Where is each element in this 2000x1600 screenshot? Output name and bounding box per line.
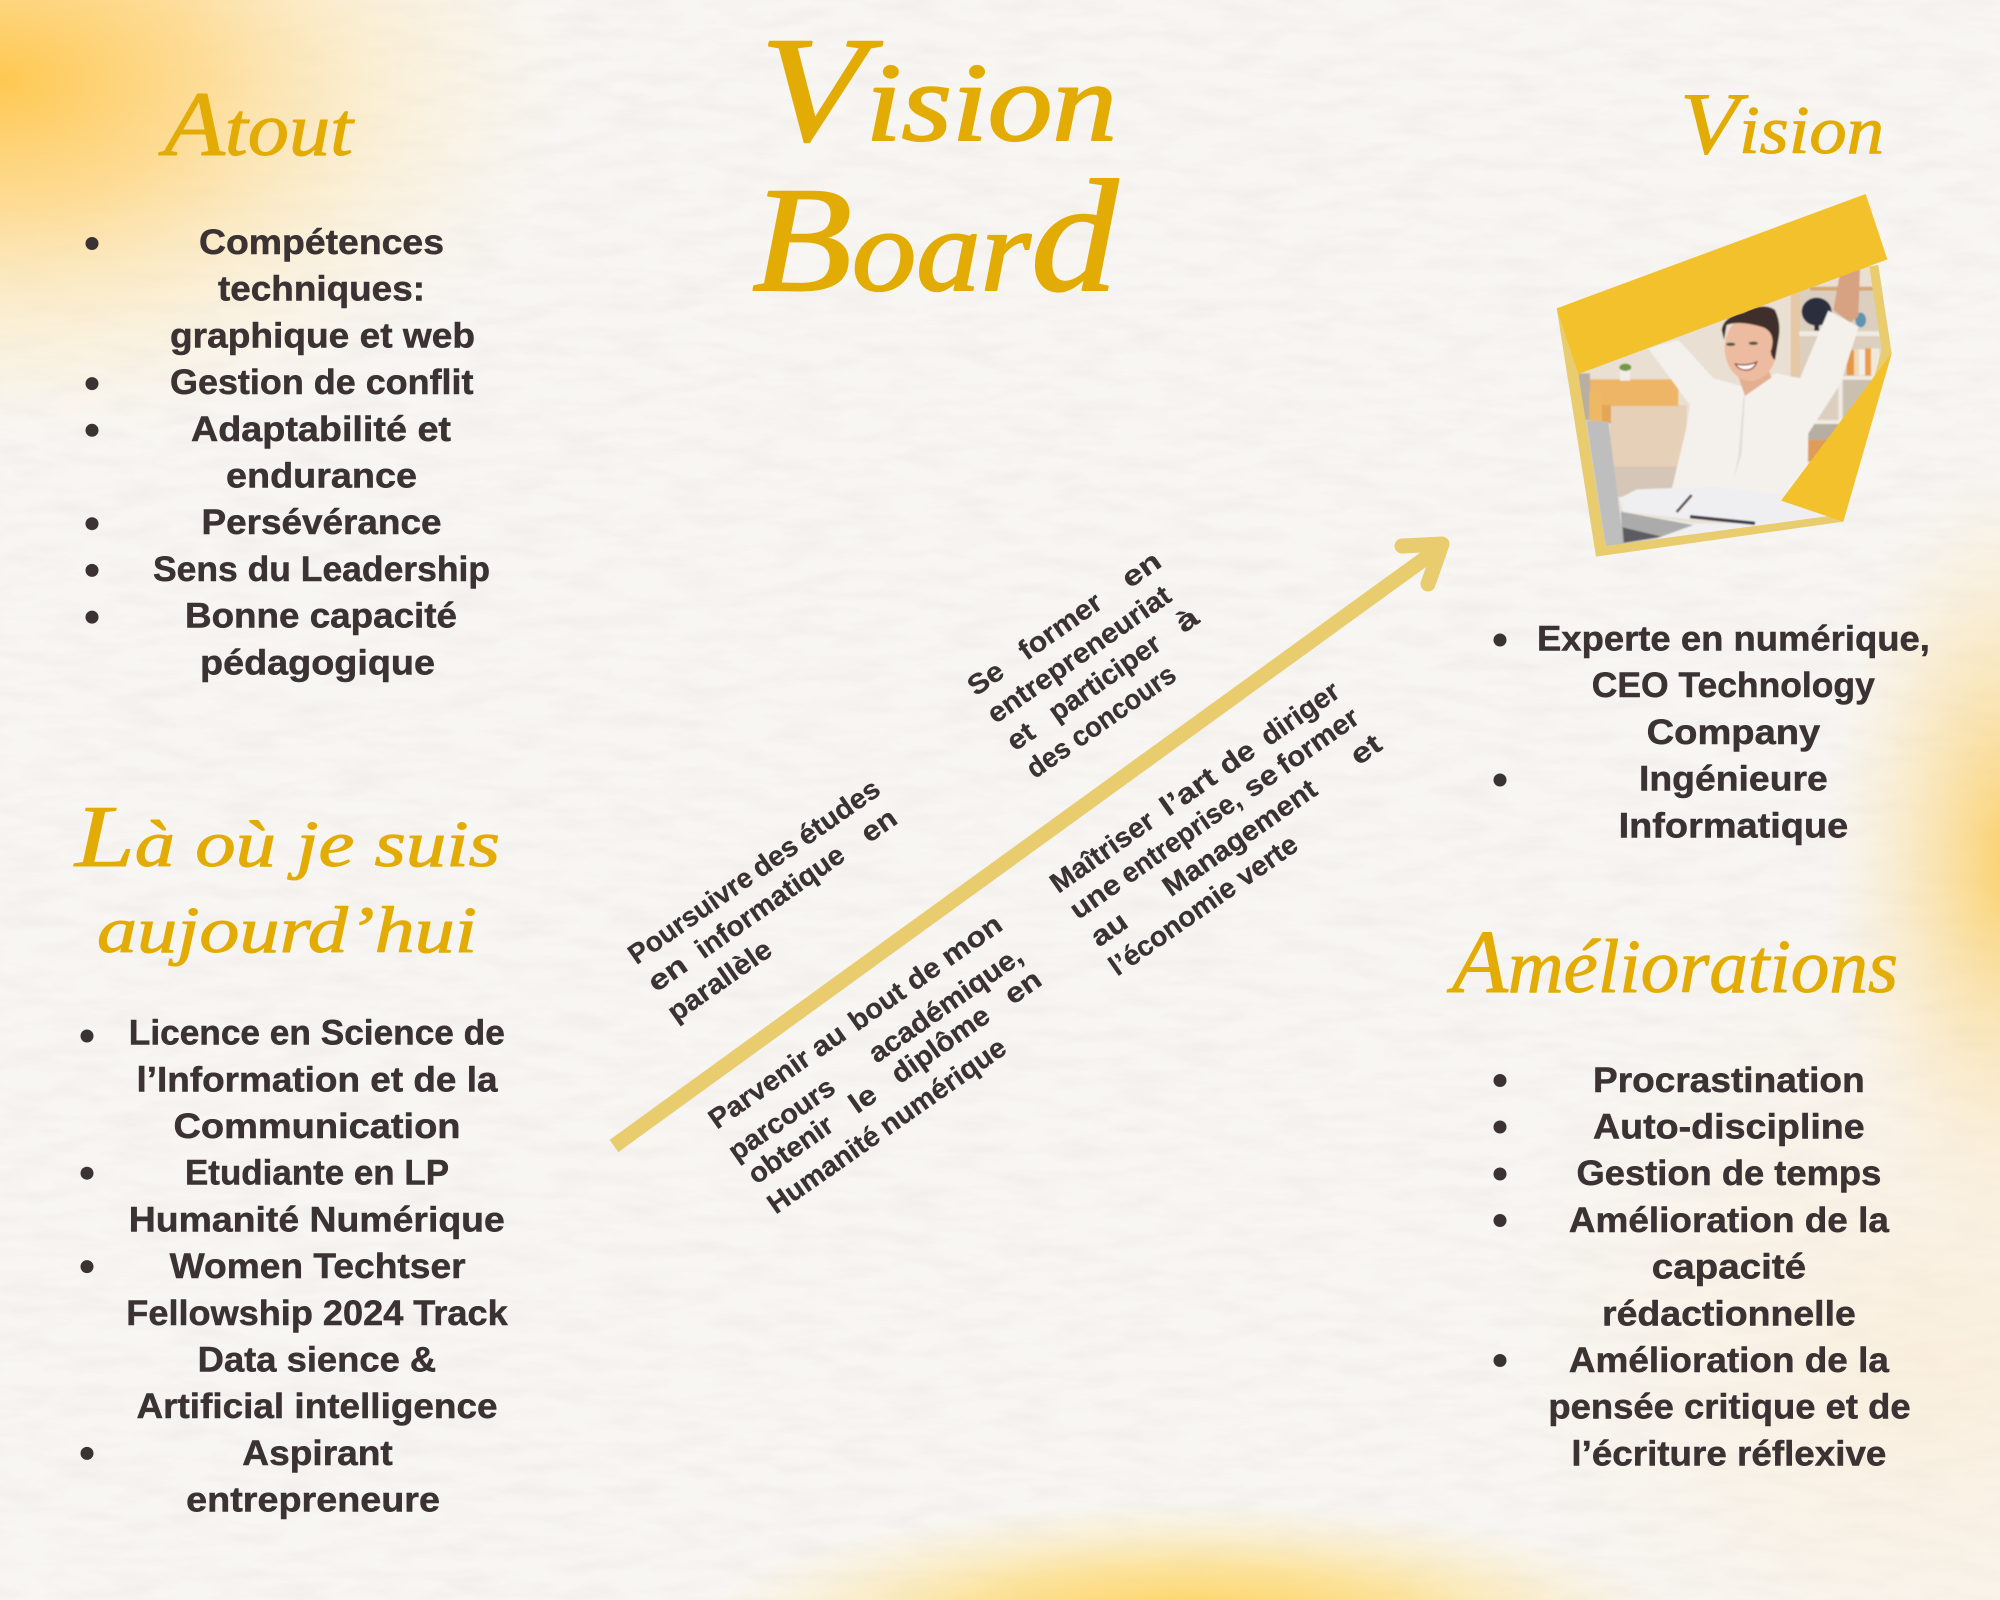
timeline note: Se former en entrepreneuriat: participer [1042,627,1167,727]
list: Atout items: pédagogique [200,643,435,682]
timeline note: Se former en entrepreneuriat: des concours [1020,658,1182,784]
list: Atout items [86,223,490,682]
heading: Améliorations: Améliorations [1447,913,1898,1012]
list: Atout items: Bonne capacité [185,597,457,636]
timeline note: Parvenir au bout de mon parcours: Humanité [761,1120,886,1220]
list: Atout items: Persévérance [202,503,442,542]
timeline note: Poursuivre des études: des [746,830,804,884]
timeline note: Parvenir au bout de mon parcours: le [843,1078,883,1119]
title: Vision Board: Board [752,147,1119,325]
title: Vision Board [752,7,1119,325]
panel: Atout [86,73,490,682]
timeline note: Parvenir au bout de mon parcours: au [805,1018,851,1063]
timeline note: Parvenir au bout de mon parcours: Parvenir [703,1042,816,1135]
timeline note: Maîtriser l'art de diriger: Maîtriser [1044,805,1160,899]
timeline note: Parvenir au bout de mon parcours: diplôme [885,999,996,1090]
timeline note: Parvenir au bout de mon parcours: de [900,951,946,997]
list: current situation: Artificial intelligence [136,1387,498,1426]
heading: Là où je suis aujourd'hui [73,789,500,967]
timeline note: Se former en entrepreneuriat: Se [961,655,1010,702]
list: improvement items: rédactionnelle [1602,1294,1856,1333]
timeline note: Maîtriser l'art de diriger: au [1084,906,1133,953]
list: current situation: Humanité Numérique [129,1200,505,1239]
timeline note: Maîtriser l'art de diriger: entreprise, [1114,784,1247,890]
panel: Là où je suis aujourd'hui [73,789,508,1520]
timeline note: Maîtriser l'art de diriger: diriger [1255,675,1345,752]
timeline note: Maîtriser l'art de diriger: une [1064,868,1126,925]
timeline note: Parvenir au bout de mon parcours: bout [843,976,911,1037]
timeline note: Poursuivre des études: en [642,949,693,998]
list: vision items: Informatique [1619,806,1848,845]
timeline note: Parvenir au bout de mon parcours: numérique [874,1031,1012,1141]
timeline note: Parvenir au bout de mon parcours: académique, [862,940,1028,1069]
timeline note: Se former en entrepreneuriat: et [1001,716,1041,757]
list: improvement items: Gestion de temps [1576,1154,1881,1193]
list: Atout items: Adaptabilité et [191,410,451,449]
heading: Là où je suis aujourd'hui: aujourd’hui [97,894,477,967]
list: vision items: Experte en numérique, [1537,620,1930,658]
timeline note: Parvenir au bout de mon parcours: en [998,963,1047,1010]
timeline note: Parvenir au bout de mon parcours: obtenir [742,1109,839,1190]
timeline note: Maîtriser l'art de diriger: former [1271,701,1365,780]
timeline note: Maîtriser l'art de diriger: se [1237,758,1284,804]
timeline note: Parvenir au bout de mon parcours: parcours [722,1071,841,1167]
list: current situation: Etudiante en LP [185,1154,449,1193]
list: current situation: Aspirant [242,1434,393,1473]
list: improvement items: Auto-discipline [1593,1108,1865,1146]
timeline note: Se former en entrepreneuriat: à [1169,601,1205,639]
timeline note: Se former en entrepreneuriat [961,545,1205,784]
list: improvement items: Amélioration de la [1569,1201,1889,1240]
list: Atout items: graphique et web [170,316,475,355]
timeline note: Se former en entrepreneuriat: former [1012,586,1108,666]
arrow: growth path [614,544,1442,1146]
list: current situation: Women Techtser [170,1247,466,1286]
timeline note: Se former en entrepreneuriat: en [1115,545,1167,594]
timeline note: Maîtriser l'art de diriger: l’art [1154,761,1222,822]
list: current situation: Licence en Science de [129,1014,505,1053]
timeline note: Maîtriser l'art de diriger: de [1213,734,1261,781]
title: Vision Board: Vision [760,7,1117,173]
timeline note: Maîtriser l'art de diriger: Management [1157,773,1323,902]
heading: Vision: Vision [1680,76,1884,173]
timeline note: Maîtriser l'art de diriger: et [1344,728,1387,771]
timeline note: Poursuivre des études: en [855,802,903,849]
timeline note: Poursuivre des études: Poursuivre [622,862,759,970]
list: current situation: Communication [174,1107,460,1146]
list: improvement items: pensée critique et de [1548,1388,1911,1427]
panel: Vision [1494,76,1930,845]
list: improvement items: Amélioration de la [1569,1341,1889,1380]
list: vision items: CEO Technology [1592,666,1875,705]
panel: Améliorations [1447,913,1911,1473]
list: improvement items: capacité [1652,1248,1806,1287]
list: improvement items: l’écriture réflexive [1571,1434,1886,1473]
timeline note: Maîtriser l'art de diriger [1044,675,1387,982]
timeline note: Poursuivre des études [622,773,903,1028]
timeline note: Poursuivre des études: informatique [689,839,850,964]
photo: woman celebrating at her desk in a yellow frame [1557,194,1900,557]
list: Atout items: techniques: [218,270,425,309]
list: current situation [80,1014,508,1520]
timeline note: Poursuivre des études: parallèle [661,933,778,1028]
list: vision items: Ingénieure [1639,760,1828,799]
timeline note: Parvenir au bout de mon parcours [703,908,1047,1220]
list: improvement items [1494,1061,1911,1473]
list: Atout items: Sens du Leadership [153,550,490,589]
list: current situation: Fellowship 2024 Track [126,1294,508,1333]
list: vision items: Company [1647,713,1821,752]
timeline note: Se former en entrepreneuriat: entrepreneuriat [981,579,1177,729]
list: Atout items: endurance [226,456,417,496]
list: current situation: l’Information et de la [136,1060,498,1099]
heading: Atout: Atout [157,73,355,175]
list: Atout items: Compétences [199,223,444,262]
timeline note: Parvenir au bout de mon parcours: mon [935,908,1008,972]
timeline note: Poursuivre des études: études [792,773,886,851]
list: current situation: Data sience & [198,1340,436,1380]
heading: Là où je suis aujourd'hui: Là où je suis [73,789,500,886]
list: improvement items: Procrastination [1593,1061,1865,1100]
list: vision items [1494,620,1930,845]
list: current situation: entrepreneure [186,1481,440,1520]
list: Atout items: Gestion de conflit [170,363,474,402]
timeline note: Maîtriser l'art de diriger: l’économie verte [1103,828,1303,982]
